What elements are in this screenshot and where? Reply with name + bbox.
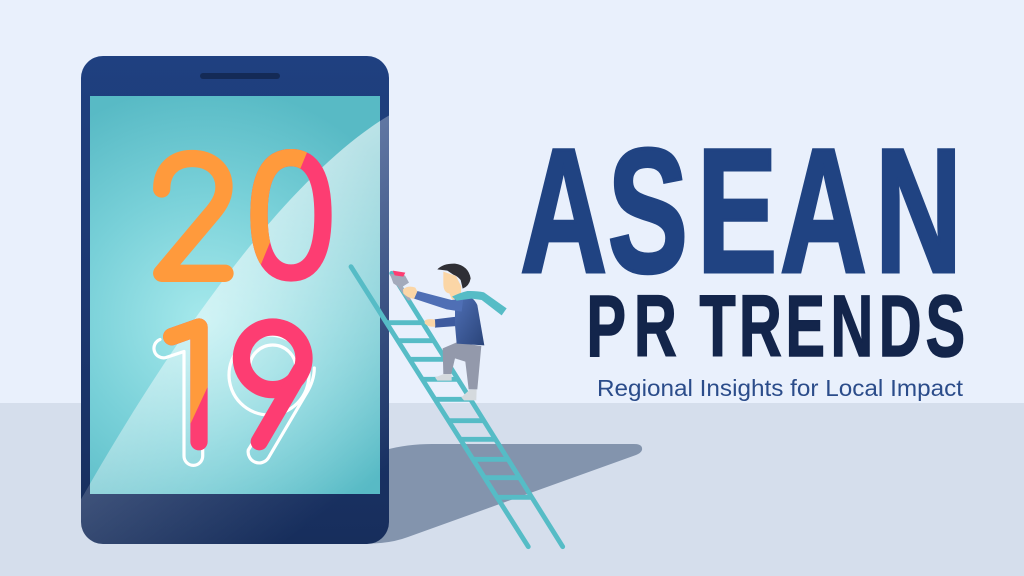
digit 1 <box>172 327 199 442</box>
front hand <box>403 287 417 299</box>
digit 2 <box>162 158 225 273</box>
scarf <box>452 291 507 315</box>
phone shadow <box>372 444 642 544</box>
back hand <box>425 319 435 327</box>
phone body <box>81 56 389 544</box>
outline of 9 <box>229 335 314 463</box>
digit 9 <box>241 327 304 442</box>
digit 0 <box>259 158 323 273</box>
outline of 1 <box>154 340 203 465</box>
phone screen <box>90 96 380 494</box>
ground <box>0 403 1024 576</box>
ladder <box>351 267 563 547</box>
subtitle: Regional Insights for Local Impact <box>597 375 963 401</box>
paintbrush <box>390 274 411 301</box>
phone <box>75 56 395 550</box>
brush paint <box>393 271 405 277</box>
front arm <box>414 291 463 312</box>
title: PR TRENDS: PR TRENDS <box>586 278 965 375</box>
hair <box>437 264 471 289</box>
trousers <box>443 342 481 389</box>
year 2019 numerals <box>154 158 323 465</box>
title: ASEAN: ASEAN <box>520 113 962 310</box>
screen light reflection <box>90 121 380 494</box>
shoes <box>435 374 477 400</box>
phone speaker <box>200 73 280 79</box>
climbing man with paintbrush <box>390 264 507 400</box>
jacket <box>455 296 484 345</box>
background wall <box>0 0 1024 404</box>
bezel light reflection <box>75 112 395 550</box>
back arm <box>434 317 457 328</box>
face <box>443 272 461 299</box>
